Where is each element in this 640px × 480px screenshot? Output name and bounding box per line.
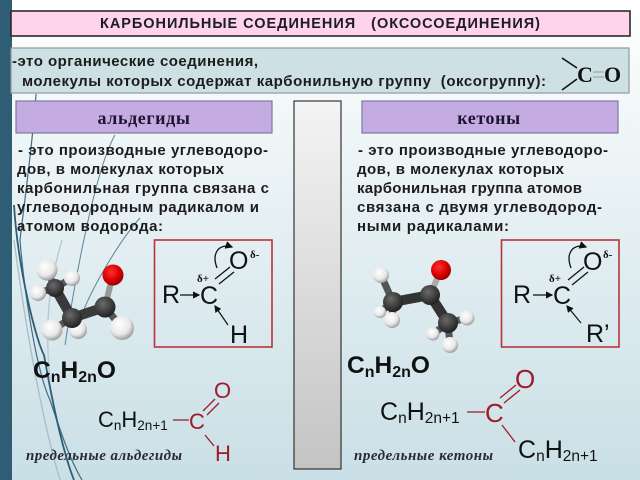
structural formula: saturated ketones xyxy=(380,364,598,465)
formula: aldehyde general: 2n xyxy=(78,369,97,386)
heading: aldehydes xyxy=(16,101,272,133)
diagram: aldehyde polarization: C xyxy=(200,282,218,310)
formula: ketone general: H xyxy=(374,352,392,379)
text block: aldehydes description: углеводородным радикалом и xyxy=(17,199,259,216)
heading: ketones: кетоны xyxy=(457,108,521,128)
definition text: молекулы которых содержат карбонильную группу (оксогруппу): xyxy=(22,73,546,90)
diagram: ketone polarization xyxy=(502,240,619,348)
text block: aldehydes description xyxy=(17,142,269,235)
formula: aldehyde general: H xyxy=(60,357,78,384)
text block: ketones description: дов, в молекулах которых xyxy=(357,161,565,178)
text block: ketones description xyxy=(357,142,608,235)
definition text: -это органические соединения, xyxy=(12,53,258,70)
structural formula: saturated ketones: C xyxy=(518,436,536,464)
left sidebar xyxy=(0,0,12,480)
diagram: aldehyde polarization: δ+ xyxy=(197,273,209,285)
text block: ketones description: карбонильная группа атомов xyxy=(357,180,582,197)
structural formula: saturated aldehydes: H xyxy=(121,407,137,432)
diagram: ketone polarization: R’ xyxy=(586,320,610,348)
heading: aldehydes: альдегиды xyxy=(98,108,190,128)
central divider bar xyxy=(294,101,341,469)
formula: aldehyde general: C xyxy=(33,357,51,384)
text block: ketones description: ными радикалами: xyxy=(357,218,509,235)
diagram: aldehyde polarization xyxy=(154,240,272,349)
diagram: ketone polarization: R xyxy=(513,281,531,309)
formula: ketone general: 2n xyxy=(392,364,411,381)
icon: carbonyl group: O xyxy=(604,62,621,87)
decorative curves xyxy=(14,94,140,480)
structural formula: saturated ketones: H xyxy=(407,398,425,426)
caption: saturated ketones: предельные кетоны xyxy=(354,448,493,464)
structural formula: saturated ketones: 2n+1 xyxy=(563,448,598,465)
text block: aldehydes description: атомом водорода: xyxy=(17,218,163,235)
structural formula: saturated ketones: C xyxy=(380,398,398,426)
formula: ketone general: n xyxy=(365,364,374,381)
diagram: aldehyde polarization: δ- xyxy=(250,249,260,261)
molecule model: aldehyde xyxy=(30,260,134,340)
text block: ketones description: связана с двумя углеводород- xyxy=(357,199,602,216)
structural formula: saturated ketones: C xyxy=(485,398,504,428)
text block: aldehydes description: карбонильная группа связана с xyxy=(17,180,269,197)
diagram: ketone polarization: C xyxy=(553,282,571,310)
formula: aldehyde general: O xyxy=(97,357,116,384)
title banner: КАРБОНИЛЬНЫЕ СОЕДИНЕНИЯ (ОКСОСОЕДИНЕНИЯ) xyxy=(100,16,540,32)
formula: aldehyde general: n xyxy=(51,369,60,386)
diagram: aldehyde polarization: O xyxy=(229,247,248,275)
caption: saturated aldehydes: предельные альдегиды xyxy=(26,448,182,464)
formula: ketone general: C xyxy=(347,352,365,379)
structural formula: saturated ketones: n xyxy=(398,410,407,427)
definition text xyxy=(12,53,546,90)
formula: ketone general: O xyxy=(411,352,430,379)
definition panel xyxy=(11,48,629,93)
structural formula: saturated aldehydes: C xyxy=(189,409,205,434)
diagram: ketone polarization: δ+ xyxy=(549,273,561,285)
structural formula: saturated aldehydes: 2n+1 xyxy=(137,418,168,433)
structural formula: saturated aldehydes: O xyxy=(214,378,231,403)
structural formula: saturated ketones: H xyxy=(545,436,563,464)
diagram: ketone polarization: O xyxy=(583,248,602,276)
icon: carbonyl group: C xyxy=(577,62,593,87)
structural formula: saturated aldehydes: H xyxy=(215,441,231,466)
molecule model: ketone xyxy=(373,260,474,353)
diagram: aldehyde polarization: R xyxy=(162,281,180,309)
text block: ketones description: - это производные углеводоро- xyxy=(358,142,608,159)
heading: ketones xyxy=(362,101,618,133)
structural formula: saturated ketones: 2n+1 xyxy=(425,410,460,427)
text block: aldehydes description: - это производные углеводоро- xyxy=(18,142,268,159)
structural formula: saturated aldehydes: C xyxy=(98,407,114,432)
diagram: aldehyde polarization: H xyxy=(230,321,248,349)
icon: carbonyl group xyxy=(562,58,621,90)
title banner xyxy=(11,11,630,36)
text block: aldehydes description: дов, в молекулах которых xyxy=(17,161,225,178)
structural formula: saturated ketones: O xyxy=(515,364,535,394)
structural formula: saturated ketones: n xyxy=(536,448,545,465)
diagram: ketone polarization: δ- xyxy=(603,249,613,261)
structural formula: saturated aldehydes: n xyxy=(114,418,121,433)
structural formula: saturated aldehydes xyxy=(98,378,231,466)
